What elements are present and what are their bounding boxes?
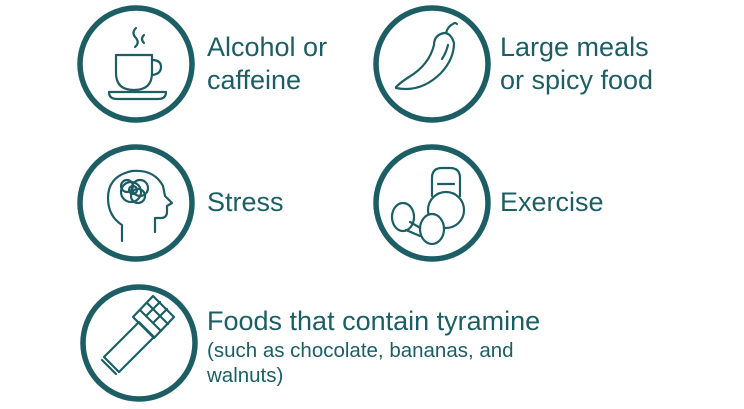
icon: chocolate bar — [83, 287, 195, 399]
text: large meals — [500, 32, 653, 95]
text: exercise: Exercise — [500, 187, 604, 217]
text: foods: Foods that contain tyramine — [207, 306, 540, 336]
text: foods — [207, 306, 540, 387]
icon: kettlebell and dumbbell — [376, 147, 488, 259]
text: stress: Stress — [207, 187, 284, 217]
text: alcohol: Alcohol or — [207, 32, 327, 62]
text: foods: walnuts) — [207, 364, 283, 387]
text: alcohol: caffeine — [207, 65, 301, 95]
icon: stressed head — [80, 147, 192, 259]
icon: chili pepper — [376, 8, 488, 120]
text: large meals: Large meals — [500, 32, 649, 62]
text: large meals: or spicy food — [500, 65, 653, 95]
text: foods: (such as chocolate, bananas, and — [207, 339, 514, 362]
text: alcohol — [207, 32, 327, 95]
icon: coffee cup — [80, 8, 192, 120]
